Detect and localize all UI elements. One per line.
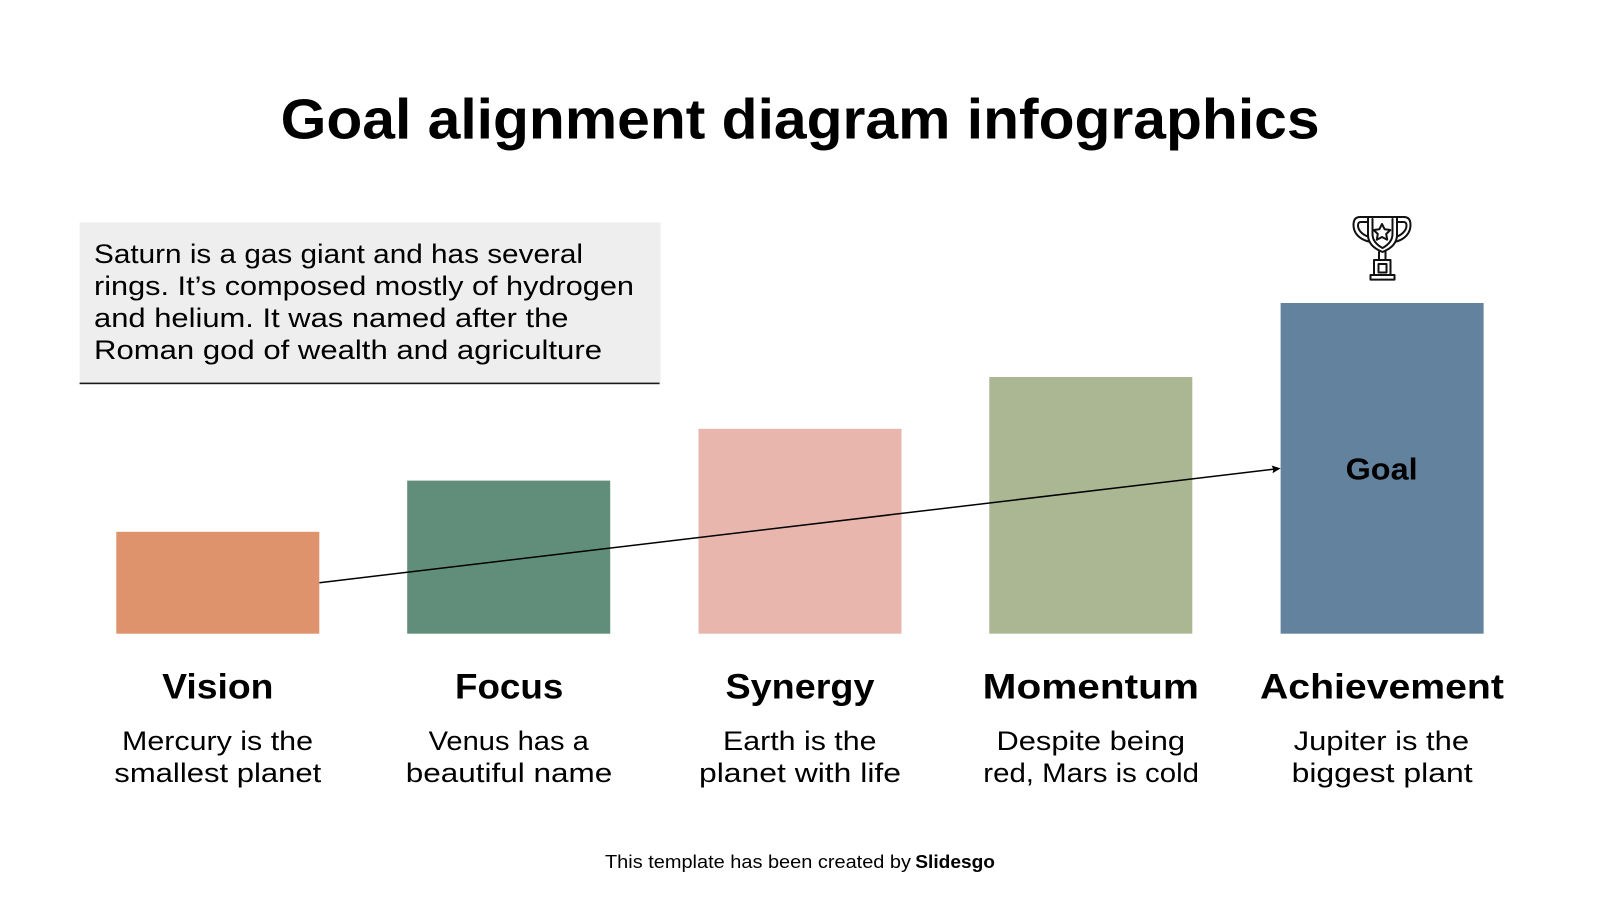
description: Focus: beautiful name [406,758,612,788]
description: Momentum [983,726,1199,788]
callout text: and helium. It was named after the [94,303,568,333]
callout text: Saturn is a gas giant and has several [94,239,583,269]
heading: Achievement: Achievement [1260,668,1504,707]
column: Momentum [983,377,1199,788]
description: Vision: smallest planet [114,758,322,788]
description: Momentum: Despite being [996,726,1185,756]
heading: Focus: Focus [455,668,563,707]
callout text: Roman god of wealth and agriculture [94,335,602,365]
bar: Vision [116,532,319,634]
column: Achievement [1260,303,1504,788]
description: Synergy: Earth is the [723,726,876,756]
callout text: rings. It’s composed mostly of hydrogen [94,271,634,301]
description: Synergy: planet with life [699,758,901,788]
description: Vision [114,726,322,788]
label: Goal: Goal [1346,452,1418,486]
bar: Focus [407,481,610,634]
description: Achievement: Jupiter is the [1294,726,1469,756]
title: Goal alignment diagram infographics [281,88,1320,152]
description: Focus: Venus has a [429,726,589,756]
description: Vision: Mercury is the [122,726,313,756]
bar: Momentum [989,377,1192,634]
description: Synergy [699,726,901,788]
callout: Saturn description [80,222,661,384]
column: Vision [114,532,322,788]
description: Achievement [1292,726,1473,788]
icon: trophy [1354,217,1410,280]
column: Focus [406,481,612,788]
column: Synergy [698,429,902,788]
heading: Synergy: Synergy [726,668,875,707]
heading: Vision: Vision [162,668,274,707]
description: Focus [406,726,612,788]
description: Momentum: red, Mars is cold [983,758,1199,788]
callout text [94,239,634,365]
footer credit: Slidesgo [915,851,995,872]
bar: Achievement [1281,303,1484,634]
footer credit: This template has been created by [605,851,912,872]
bar: Synergy [698,429,902,634]
arrow: Vision to Goal [319,466,1281,583]
description: Achievement: biggest plant [1292,758,1473,788]
heading: Momentum: Momentum [983,668,1199,707]
